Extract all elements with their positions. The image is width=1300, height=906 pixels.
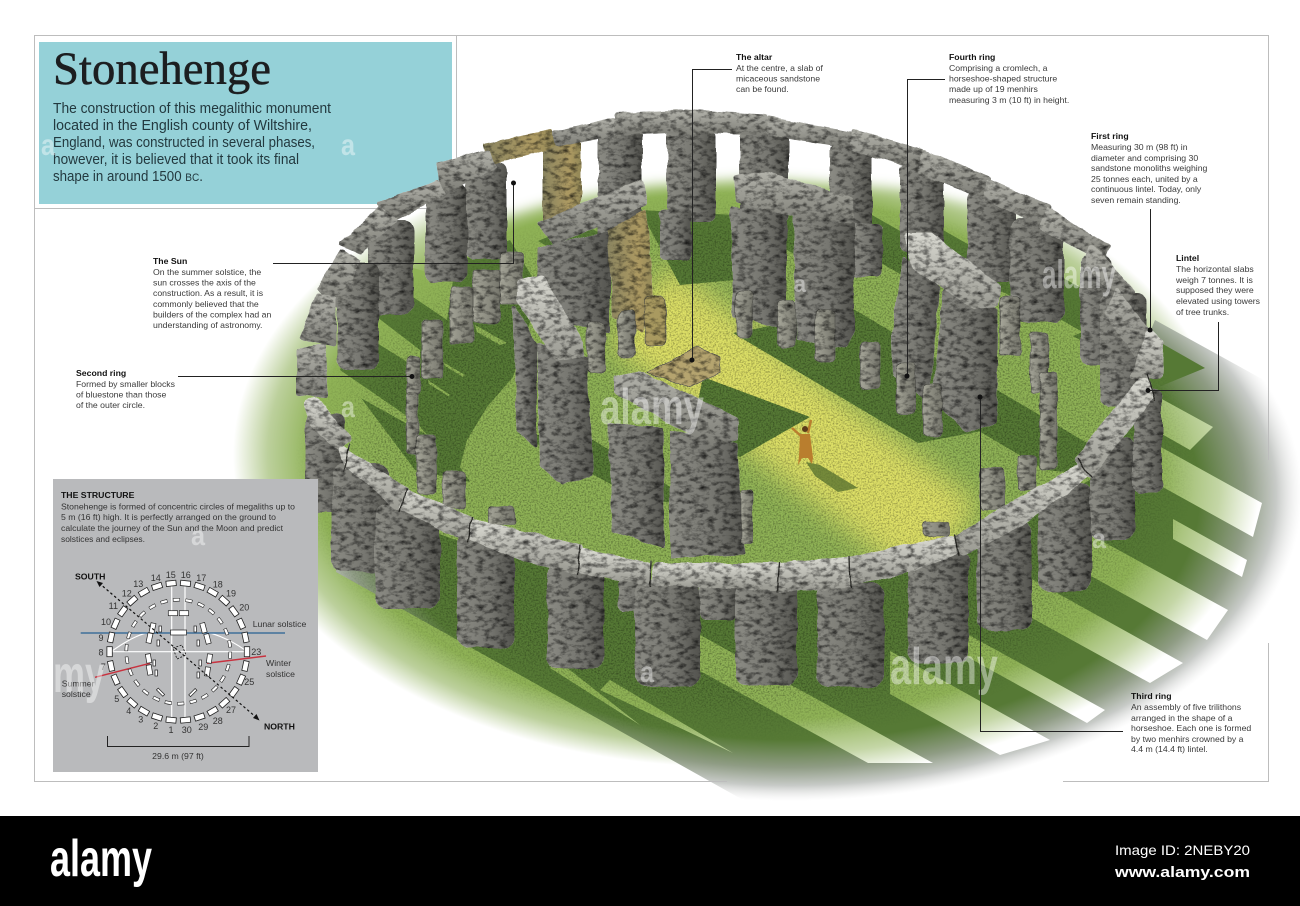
right bluestones — [922, 372, 1057, 536]
callout: fourth ring: measuring 3 m (10 ft) in height. — [949, 95, 1069, 105]
content frame — [34, 36, 1268, 782]
trilithon left — [515, 278, 591, 483]
compass and solstice labels: Lunar solstice — [253, 619, 306, 629]
callout: second ring: Second ring — [76, 368, 126, 378]
title panel — [39, 42, 452, 204]
site address: www.alamy.com — [1114, 865, 1250, 881]
compass and solstice labels: solstice — [62, 689, 91, 699]
callout: the sun: The Sun — [153, 256, 187, 266]
human figure — [792, 420, 858, 492]
watermark on panel: my — [53, 646, 105, 704]
callout: the sun: builders of the complex had an — [153, 310, 271, 320]
watermarks — [41, 129, 1116, 696]
ground with grass and long shadows — [236, 171, 1296, 797]
intro text: shape in around 1500 BC. — [53, 169, 203, 185]
callout: the sun — [153, 180, 516, 330]
stone numbers: 2 — [153, 721, 158, 731]
second ring of small stones — [126, 600, 230, 704]
stone numbers: 11 — [109, 601, 118, 611]
callout: the sun: construction. As a result, it is — [153, 288, 264, 298]
panel: the structure — [53, 479, 318, 772]
callout: lintel — [1146, 253, 1261, 393]
compass and solstice labels — [62, 572, 306, 732]
stone numbers: 7 — [101, 662, 106, 672]
stone numbers: 28 — [213, 716, 223, 726]
grass — [233, 143, 1227, 767]
compass and solstice labels: Summer — [62, 678, 95, 688]
panel text: calculate the journey of the Sun and the Moon and predict — [61, 523, 284, 533]
back bluestones — [422, 212, 1048, 393]
watermark on panel: a — [191, 520, 205, 551]
callout: the altar: The altar — [736, 52, 773, 62]
callout: first ring: First ring — [1091, 131, 1129, 141]
intro text — [53, 101, 331, 185]
stone numbers: 4 — [126, 706, 131, 716]
stone numbers: 14 — [151, 573, 161, 583]
stone numbers: 25 — [244, 677, 254, 687]
callout: fourth ring — [904, 52, 1069, 378]
centre marker — [173, 645, 186, 659]
stone numbers: 29 — [198, 722, 208, 732]
white fade above the grass horizon — [440, 110, 1300, 345]
stone numbers: 16 — [181, 570, 191, 580]
callout: fourth ring: Fourth ring — [949, 52, 995, 62]
plan diagram — [62, 570, 306, 761]
watermark on panel — [53, 520, 205, 704]
trilithon right — [894, 236, 997, 431]
outer ring front uprights — [307, 390, 1160, 685]
footer logo: alamy — [50, 830, 152, 888]
callout: lintel: elevated using towers — [1176, 296, 1261, 306]
interior shadows of back uprights — [538, 206, 1205, 386]
watermarks: alamy — [890, 638, 998, 696]
grass grain — [318, 198, 1182, 731]
altar stone — [647, 347, 720, 387]
stone numbers: 1 — [168, 725, 174, 735]
outer ring back uprights — [339, 130, 1145, 405]
panel text — [61, 502, 295, 544]
stone numbers: 9 — [98, 633, 104, 643]
callout: first ring: seven remain standing. — [1091, 195, 1181, 205]
outer ring of thirty stones — [107, 580, 250, 723]
watermarks: a — [794, 271, 807, 298]
lintel joints — [344, 373, 1155, 592]
intro text: The construction of this megalithic monument — [53, 101, 331, 117]
callout: first ring: sandstone monoliths weighing — [1091, 163, 1208, 173]
callout: fourth ring: made up of 19 menhirs — [949, 84, 1039, 94]
callout: third ring: Third ring — [1131, 691, 1172, 701]
watermarks: a — [341, 129, 355, 162]
watermarks: a — [1092, 523, 1106, 554]
panel text: solstices and eclipses. — [61, 534, 145, 544]
callout: first ring: Measuring 30 m (98 ft) in — [1091, 142, 1188, 152]
stone numbers: 10 — [101, 617, 111, 627]
outer ring front lintels — [307, 333, 1160, 589]
stone numbers — [98, 570, 261, 735]
callout: lintel: of tree trunks. — [1176, 307, 1229, 317]
stone numbers: 15 — [166, 570, 176, 580]
callout: lintel: Lintel — [1176, 253, 1199, 263]
stone numbers: 20 — [239, 602, 249, 612]
footer bar — [0, 816, 1300, 906]
callout: lintel: The horizontal slabs — [1176, 264, 1254, 274]
stone numbers: 12 — [122, 588, 132, 598]
stone numbers: 19 — [226, 588, 236, 598]
trilithon back right — [732, 174, 853, 345]
watermarks: alamy — [600, 379, 704, 435]
inner trilithons plan — [145, 611, 213, 697]
stone numbers: 3 — [138, 714, 143, 724]
compass and solstice labels: Winter — [266, 658, 291, 668]
watermarks: alamy — [1042, 253, 1116, 297]
outer ring back lintels — [299, 112, 1148, 395]
left interior shadow mass — [340, 240, 540, 482]
inner bluestones — [587, 290, 942, 437]
callout: lintel: weigh 7 tonnes. It is — [1175, 275, 1253, 285]
left interior light strips — [340, 267, 507, 435]
callout: third ring: An assembly of five trilithons — [1131, 702, 1242, 712]
callout: first ring: continuous lintel. Today, only — [1091, 184, 1202, 194]
intro text: England, was constructed in several phases, — [53, 135, 315, 151]
intro text: however, it is believed that it took its final — [53, 152, 299, 168]
trilithon front centre — [610, 374, 752, 556]
callout: fourth ring: Comprising a cromlech, a — [949, 63, 1048, 73]
callout: second ring: Formed by smaller blocks — [76, 379, 176, 389]
watermarks: a — [341, 391, 355, 424]
panel text: Stonehenge is formed of concentric circles of megaliths up to — [61, 502, 295, 512]
callout: the altar: can be found. — [736, 84, 789, 94]
callout: first ring: 25 tonnes each, united by a — [1091, 174, 1198, 184]
callout: third ring: 4.4 m (14.4 ft) lintel. — [1131, 744, 1208, 754]
title: Stonehenge — [53, 44, 271, 95]
scale bar: 29.6 m (97 ft) — [152, 751, 204, 761]
image id: Image ID: 2NEBY20 — [1115, 842, 1250, 858]
left bluestones — [407, 357, 515, 525]
callout: fourth ring: horseshoe-shaped structure — [949, 74, 1057, 84]
callout: third ring: arranged in the shape of a — [1131, 713, 1233, 723]
callout: third ring — [978, 394, 1251, 754]
trilithon back left lit by the sun — [539, 182, 651, 331]
sun beam — [610, 265, 980, 585]
callout: third ring: by two menhirs crowned by a — [1131, 734, 1244, 744]
stone numbers: 18 — [213, 580, 223, 590]
callout: the sun: understanding of astronomy. — [153, 320, 262, 330]
outer shadow mass of ring — [336, 320, 1300, 815]
north south axis arrow — [96, 581, 260, 720]
callout: the altar: micaceous sandstone — [736, 74, 820, 84]
callout: second ring — [76, 368, 414, 410]
callout: second ring: of bluestone than those — [76, 390, 166, 400]
compass and solstice labels: solstice — [266, 669, 295, 679]
callout: the sun: sun crosses the axis of the — [153, 278, 256, 288]
callout: third ring: horseshoe. Each one is formed — [1131, 723, 1251, 733]
intro text: located in the English county of Wiltshire, — [53, 118, 312, 134]
callout: the altar — [690, 52, 824, 362]
watermarks: a — [640, 656, 654, 689]
panel heading: THE STRUCTURE — [61, 490, 135, 500]
stone numbers: 27 — [226, 705, 236, 715]
monument — [299, 112, 1160, 685]
stone numbers: 13 — [133, 579, 143, 589]
stone numbers: 30 — [182, 725, 192, 735]
callout: the altar: At the centre, a slab of — [736, 63, 824, 73]
stone numbers: 8 — [98, 648, 104, 658]
callout: the sun: On the summer solstice, the — [153, 267, 261, 277]
light strips between the long shadows — [550, 398, 1262, 763]
callout: first ring — [1091, 131, 1208, 332]
scale bar — [108, 736, 249, 761]
compass and solstice labels: SOUTH — [75, 572, 105, 582]
stone numbers: 17 — [196, 573, 206, 583]
callout: the sun: commonly believed that the — [153, 299, 259, 309]
stone numbers: 23 — [251, 647, 261, 657]
callout: second ring: of the outer circle. — [76, 400, 145, 410]
panel text: 5 m (16 ft) high. It is perfectly arranged on the ground to — [61, 512, 276, 522]
compass and solstice labels: NORTH — [264, 722, 295, 732]
callout: first ring: diameter and comprising 30 — [1091, 153, 1198, 163]
callout: lintel: supposed they were — [1176, 285, 1254, 295]
alignment lines — [81, 583, 285, 720]
watermarks: a — [41, 129, 55, 162]
trilithon shadows — [517, 310, 1150, 505]
stone numbers: 5 — [114, 694, 119, 704]
